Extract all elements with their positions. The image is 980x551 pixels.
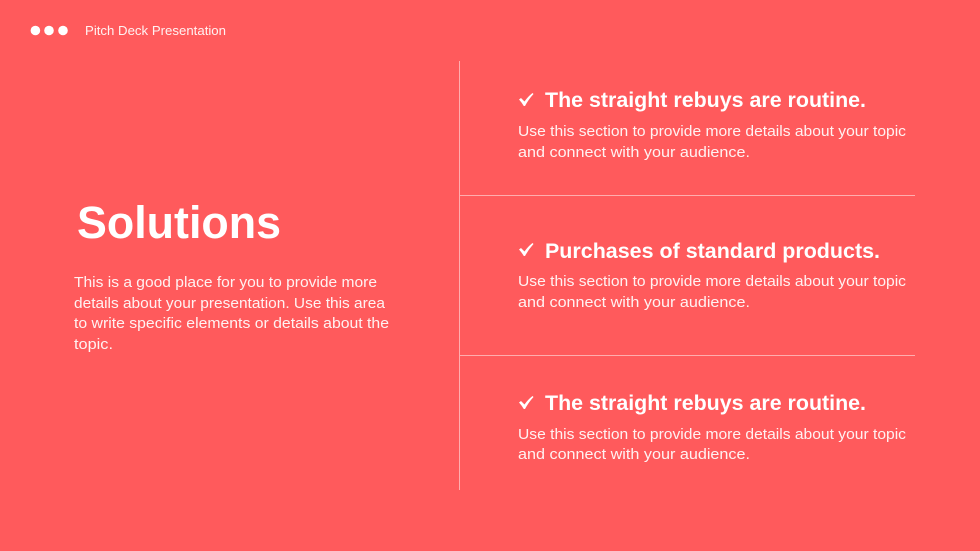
item 2 heading: Purchases of standard products. bbox=[545, 240, 880, 263]
icon: check mark bbox=[519, 243, 534, 256]
item 2 text bbox=[518, 273, 907, 311]
header: dots and deck label bbox=[31, 23, 226, 38]
intro paragraph: This is a good place for you to provide more bbox=[74, 274, 377, 291]
panel: solution item 3 bbox=[518, 392, 907, 463]
icon: three dots bbox=[31, 26, 68, 35]
item 3 text: and connect with your audience. bbox=[518, 446, 750, 463]
item 1 text: and connect with your audience. bbox=[518, 144, 750, 161]
item 3 heading: The straight rebuys are routine. bbox=[545, 392, 866, 415]
item 3 text bbox=[518, 426, 907, 463]
panel: solution item 1 bbox=[518, 89, 907, 161]
panel: solution item 2 bbox=[518, 240, 907, 311]
item 2 text: Use this section to provide more details about your topic bbox=[518, 273, 907, 290]
item 2 text: and connect with your audience. bbox=[518, 294, 750, 311]
intro paragraph bbox=[74, 274, 389, 353]
item 1 text: Use this section to provide more details about your topic bbox=[518, 123, 907, 140]
icon: check mark bbox=[519, 93, 534, 106]
item 3 text: Use this section to provide more details about your topic bbox=[518, 426, 907, 443]
item 1 text bbox=[518, 123, 907, 161]
item 1 heading: The straight rebuys are routine. bbox=[545, 89, 866, 112]
intro paragraph: details about your presentation. Use this area bbox=[74, 295, 386, 312]
intro paragraph: to write specific elements or details about the bbox=[74, 315, 389, 332]
intro paragraph: topic. bbox=[74, 336, 113, 353]
icon: check mark bbox=[519, 396, 534, 409]
deck label: Pitch Deck Presentation bbox=[85, 23, 226, 38]
panel: left intro bbox=[74, 197, 389, 353]
title: Solutions bbox=[77, 197, 281, 248]
